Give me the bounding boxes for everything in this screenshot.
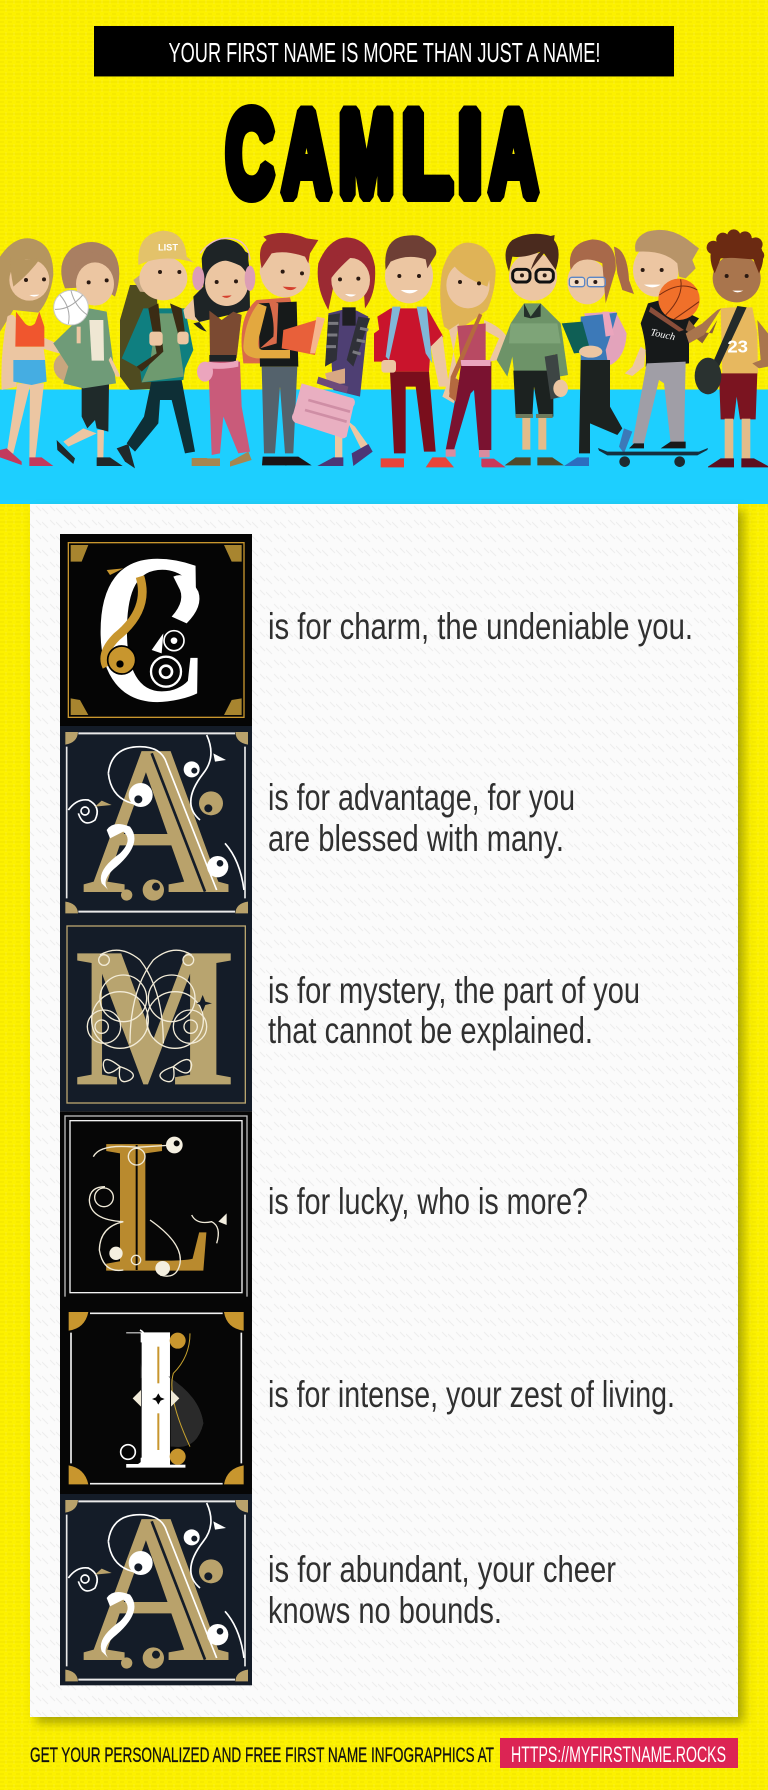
tile: letter L — [60, 1099, 252, 1313]
text: A meaning (second): is for abundant, your cheer — [268, 1549, 616, 1590]
person: skater with basketball — [598, 230, 717, 467]
footer: call to action: GET YOUR PERSONALIZED AND FREE FIRST NAME INFOGRAPHICS AT — [30, 1744, 494, 1767]
title: name: A — [489, 87, 538, 221]
person: hiker with cap and backpack — [117, 231, 220, 468]
cyan ground band — [0, 390, 768, 504]
text: M meaning: is for mystery, the part of you — [268, 970, 640, 1011]
person: girl with orange top — [0, 238, 82, 466]
top banner — [94, 26, 674, 77]
tile: letter M: M — [74, 907, 236, 1128]
person: boy with tank top and bag: 23 — [727, 337, 748, 357]
tile: letter C: C — [93, 511, 210, 747]
tile: letter A: A — [82, 703, 230, 939]
text: A meaning (second) — [268, 1549, 616, 1631]
text: A meaning: are blessed with many. — [268, 818, 564, 859]
panel: white card — [30, 504, 744, 1723]
person: hiker with cap and backpack: LIST — [158, 243, 178, 253]
illustration: group of people, right half — [374, 229, 768, 467]
tile: letter I: I — [120, 1284, 192, 1513]
text: A meaning: is for advantage, for you — [268, 777, 575, 818]
title: name: M — [339, 87, 394, 221]
person: girl with tablet and ponytail — [562, 239, 634, 466]
person: girl with pink bag — [292, 237, 375, 466]
person: girl with headphones — [183, 238, 255, 467]
text: A meaning — [268, 777, 575, 859]
title: name — [226, 87, 538, 221]
person: boy with tank top and bag — [686, 229, 768, 467]
title: name: A — [282, 87, 331, 221]
person: boy with book — [242, 233, 325, 465]
text: M meaning: that cannot be explained. — [268, 1010, 593, 1051]
tile: letter L: L — [103, 1099, 213, 1313]
person: skater with basketball: Touch — [649, 327, 676, 343]
tile: letter I — [60, 1284, 252, 1513]
text: A meaning (second): knows no bounds. — [268, 1590, 502, 1631]
person: blonde girl — [440, 243, 507, 467]
text: L meaning: is for lucky, who is more? — [268, 1181, 588, 1222]
title: name: I — [458, 87, 482, 221]
person: boy with glasses and green sweater — [497, 234, 568, 465]
illustration: group of people, left half — [0, 231, 375, 468]
tile: letter A (second): A — [82, 1471, 230, 1707]
title: name: C — [226, 87, 274, 221]
person: boy in red with backpack straps — [374, 235, 454, 467]
title: name: L — [402, 87, 452, 221]
person: girl with volleyball — [53, 242, 123, 466]
text: M meaning — [268, 970, 640, 1051]
